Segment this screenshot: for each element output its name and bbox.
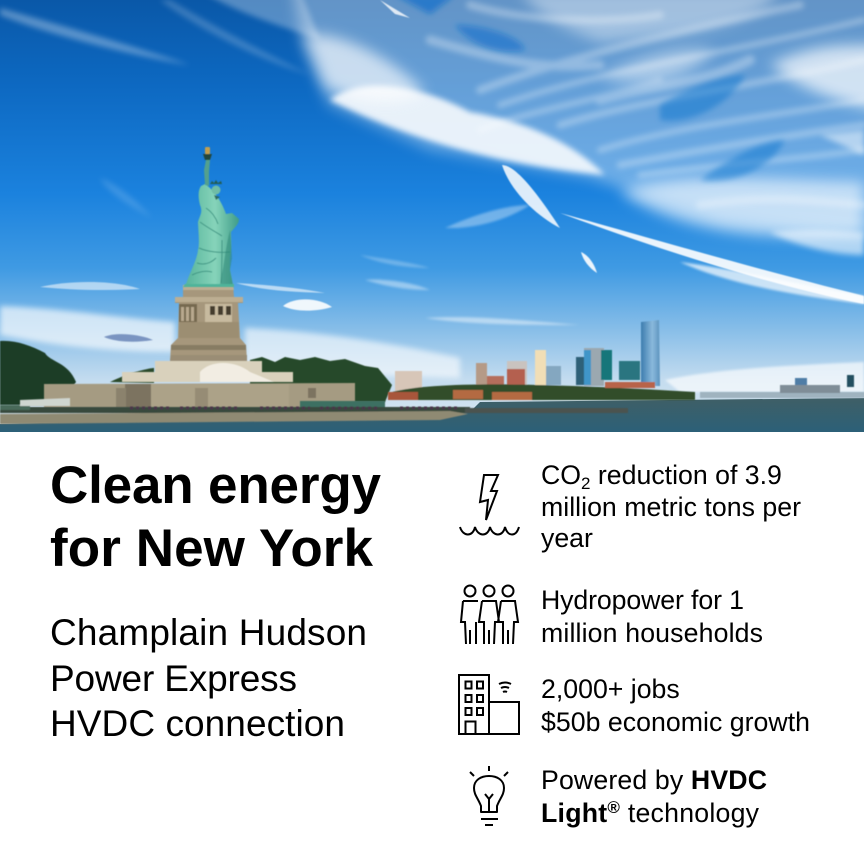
stat: CO2 reduction: million metric tons per [541, 492, 801, 522]
stat: CO2 reduction [541, 460, 801, 553]
harbour water [0, 398, 864, 432]
stat: CO2 reduction: year [541, 523, 593, 553]
icon: light bulb [470, 766, 508, 825]
stat: hydropower: Hydropower for 1 [541, 585, 744, 615]
icon: lightning bolt over water [460, 475, 519, 534]
stat: HVDC Light technology: Light [541, 798, 607, 828]
statue pedestal and fort [44, 285, 355, 408]
skyline: Jersey City [388, 320, 864, 400]
stat: jobs and growth [541, 674, 810, 737]
trees [0, 341, 392, 405]
waterfront [0, 398, 628, 424]
stat: CO2 reduction: reduction of 3.9 [590, 460, 782, 490]
title line 2: for New York [50, 519, 374, 578]
stat: CO2 reduction: CO [541, 460, 581, 490]
icon: office building with wifi [459, 675, 519, 734]
sky gaps between clouds [395, 0, 785, 181]
stat: HVDC Light technology: ® [607, 798, 620, 817]
stat: hydropower: million households [541, 618, 763, 648]
subtitle: Power Express [50, 658, 297, 699]
icon: three people [461, 586, 518, 644]
subtitle: HVDC connection [50, 703, 345, 744]
stat: HVDC Light technology: Powered by HVDC [541, 765, 767, 795]
stat: HVDC Light technology: technology [620, 798, 760, 828]
subtitle [50, 612, 367, 744]
stat: hydropower [541, 585, 763, 648]
clouds: upper right sky [0, 0, 864, 304]
statue of liberty [183, 147, 239, 287]
stat: jobs and growth: $50b economic growth [541, 707, 810, 737]
subtitle: Champlain Hudson [50, 612, 367, 653]
clouds: horizon [0, 255, 864, 392]
photo: Statue of Liberty and New York harbour [0, 0, 864, 432]
stat: jobs and growth: 2,000+ jobs [541, 674, 680, 704]
stat: CO2 reduction: 2 [581, 474, 590, 493]
stat: HVDC Light technology [541, 765, 767, 828]
title: Clean energy [50, 456, 382, 515]
